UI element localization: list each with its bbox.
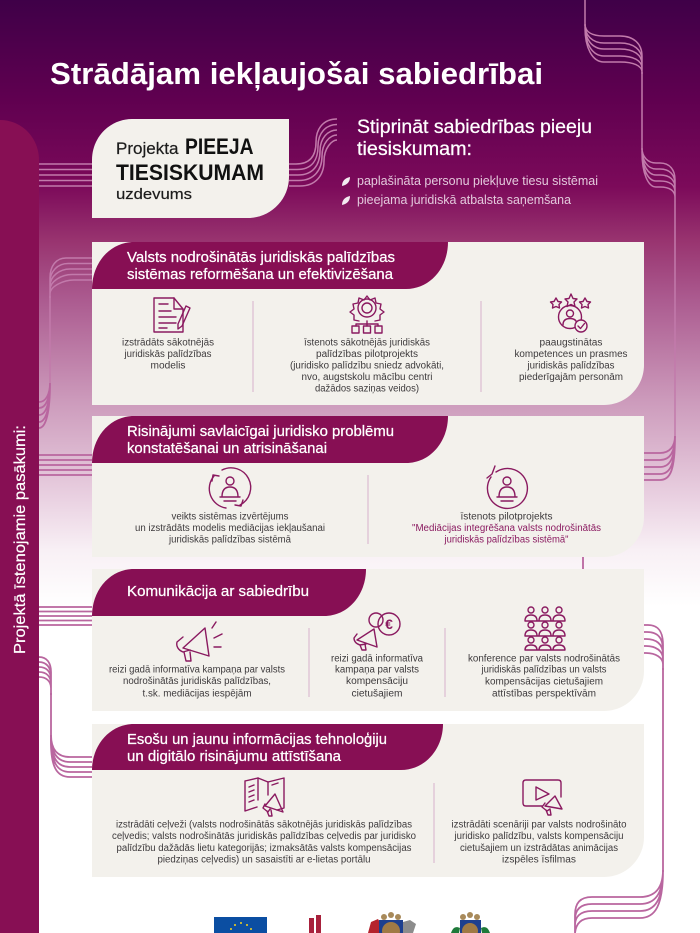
goal list [342,174,598,207]
text: skills: piederīgajām personām [519,372,623,383]
icon: leaf bullet 1 [342,177,350,186]
text: scenarios: juridisko palīdzību, valsts kompensāciju [454,831,624,842]
text: skills: juridiskās palīdzības [527,360,615,372]
text: evaluation [135,512,325,546]
text: conference: kompensācijas cietušajiem [485,676,603,688]
icon: video with megaphone [523,780,562,815]
sidebar label: Projektā īstenojamie pasākumi: [12,425,29,654]
icon: audience [525,607,565,650]
text: guides: piedziņas ceļvedis) un sasaistīti ar e-lietas portālu [158,854,370,866]
text: pilot project [290,338,444,394]
icon: mediation cycle left [209,468,251,508]
connector stripes from project box [289,119,337,186]
text: pilot project: palīdzības pilotprojekts [316,349,418,360]
text: pilot project: (juridisko palīdzību sniedz advokāti, [290,360,444,372]
icon: stars and person [550,294,590,332]
panel heading: sistēmas reformēšana un efektivizēšana [127,267,394,283]
goal heading: Stiprināt sabiedrības pieeju [357,117,592,138]
panel: digital solutions [92,724,644,877]
goal heading: tiesiskumam: [357,139,472,160]
project box: PIEEJA [185,134,254,159]
goal list: pieejama juridiskā atbalsta saņemšana [357,193,571,207]
panel heading: Valsts nodrošinātās juridiskās palīdzības [127,250,395,266]
icon: megaphone [177,622,222,661]
project box: uzdevums [116,186,192,203]
text: evaluation: un izstrādāts modelis mediācijas iekļaušanai [135,523,325,534]
panel: early resolution [92,416,644,557]
decorative wave: top right [585,0,675,480]
panel heading: Esošu un jaunu informācijas tehnoloģiju [127,732,387,748]
text: campaign: reizi gadā informatīva kampaņa par valsts [109,664,285,676]
text: compensation campaign: cietušajiem [352,688,402,700]
text: scenarios: izstrādāti scenāriji par valsts nodrošināto [452,820,627,830]
icon: guide with megaphone [245,778,284,816]
icon: megaphone with euro: € [385,616,393,632]
panel: legal aid reform [92,242,644,405]
logo: EU flag [214,917,267,933]
text: scenarios [452,820,627,866]
panel heading: konstatēšanai un atrisināšanai [127,441,327,457]
goal list: paplašināta personu piekļuve tiesu sistēmai [357,174,598,188]
panel heading [92,569,366,616]
text: mediation pilot: īstenots pilotprojekts [460,512,553,522]
text: compensation campaign: reizi gadā informatīva [331,654,424,664]
text: pilot project: nvo, augstskolu mācību centri [302,372,432,383]
text: conference: konference par valsts nodrošinātās [468,654,620,664]
text: guides: ceļvedis; valsts nodrošinātās juridiskās palīdzības ceļvedis par juridisko [112,831,417,842]
panel heading: Komunikācija ar sabiedrību [127,584,309,600]
icon: mediation cycle right [487,466,527,508]
text: scenarios: izspēles īsfilmas [502,854,576,866]
text: campaign: t.sk. mediācijas iespējām [142,688,252,700]
text: pilot project: dažādos saziņas veidos) [315,384,419,394]
text: model: juridiskās palīdzības [124,349,212,360]
panel heading [92,724,443,770]
text: conference [468,654,620,700]
decorative wave: bottom right [575,557,663,933]
text: evaluation: veikts sistēmas izvērtējums [172,512,289,522]
text: scenarios: cietušajiem un izstrādātas animācijas [460,843,618,854]
panel heading: un digitālo risinājumu attīstīšana [127,749,342,765]
panel heading [92,242,448,289]
text: model: modelis [150,360,186,372]
text: campaign: nodrošinātās juridiskās palīdzības, [123,676,271,687]
project box: Projekta [116,140,179,158]
text: mediation pilot [412,512,601,546]
text: model: izstrādāts sākotnējās [122,338,214,348]
text: skills: paaugstinātas [540,338,603,348]
text: evaluation: juridiskās palīdzības sistēmā [168,534,292,546]
logo: red bars [309,915,321,933]
panel: communication [92,569,644,711]
panel heading [92,416,448,463]
text: compensation campaign [331,654,424,700]
icon: document and pencil [154,298,190,332]
text: mediation pilot: "Mediācijas integrēšana valsts nodrošinātās [412,523,601,534]
panel heading: Risinājumi savlaicīgai juridisko problēmu [127,424,394,440]
text: conference: attīstības perspektīvām [492,688,596,700]
project box: TIESISKUMAM [116,160,264,185]
decorative wave: left side [39,164,92,777]
title: Strādājam iekļaujošai sabiedrībai [50,56,543,91]
project box [92,119,289,218]
text: compensation campaign: kampaņa par valsts [335,664,419,676]
icon: gear and network [350,296,384,333]
text: mediation pilot: juridiskās palīdzības sistēmā" [444,534,569,546]
icon: megaphone with euro [354,613,400,650]
text: guides: izstrādāti ceļveži (valsts nodrošinātās sākotnējās juridiskās palīdzības [116,820,412,830]
logo: coat of arms small [451,912,490,933]
logo: coat of arms large [368,912,416,933]
icon: leaf bullet 2 [342,196,350,205]
text: pilot project: īstenots sākotnējās juridiskās [304,338,430,348]
text: compensation campaign: kompensāciju [346,676,408,687]
sidebar [0,120,39,933]
text: conference: juridiskās palīdzības un valsts [481,664,607,676]
goal heading [357,117,592,160]
text: skills [514,338,628,383]
text: guides: palīdzību dažādās lietu kategorijās; izmaksātās valsts kompensācijas [116,843,412,854]
text: model [122,338,214,372]
text: skills: kompetences un prasmes [514,349,628,360]
text: campaign [109,664,285,700]
text: guides [112,820,417,866]
